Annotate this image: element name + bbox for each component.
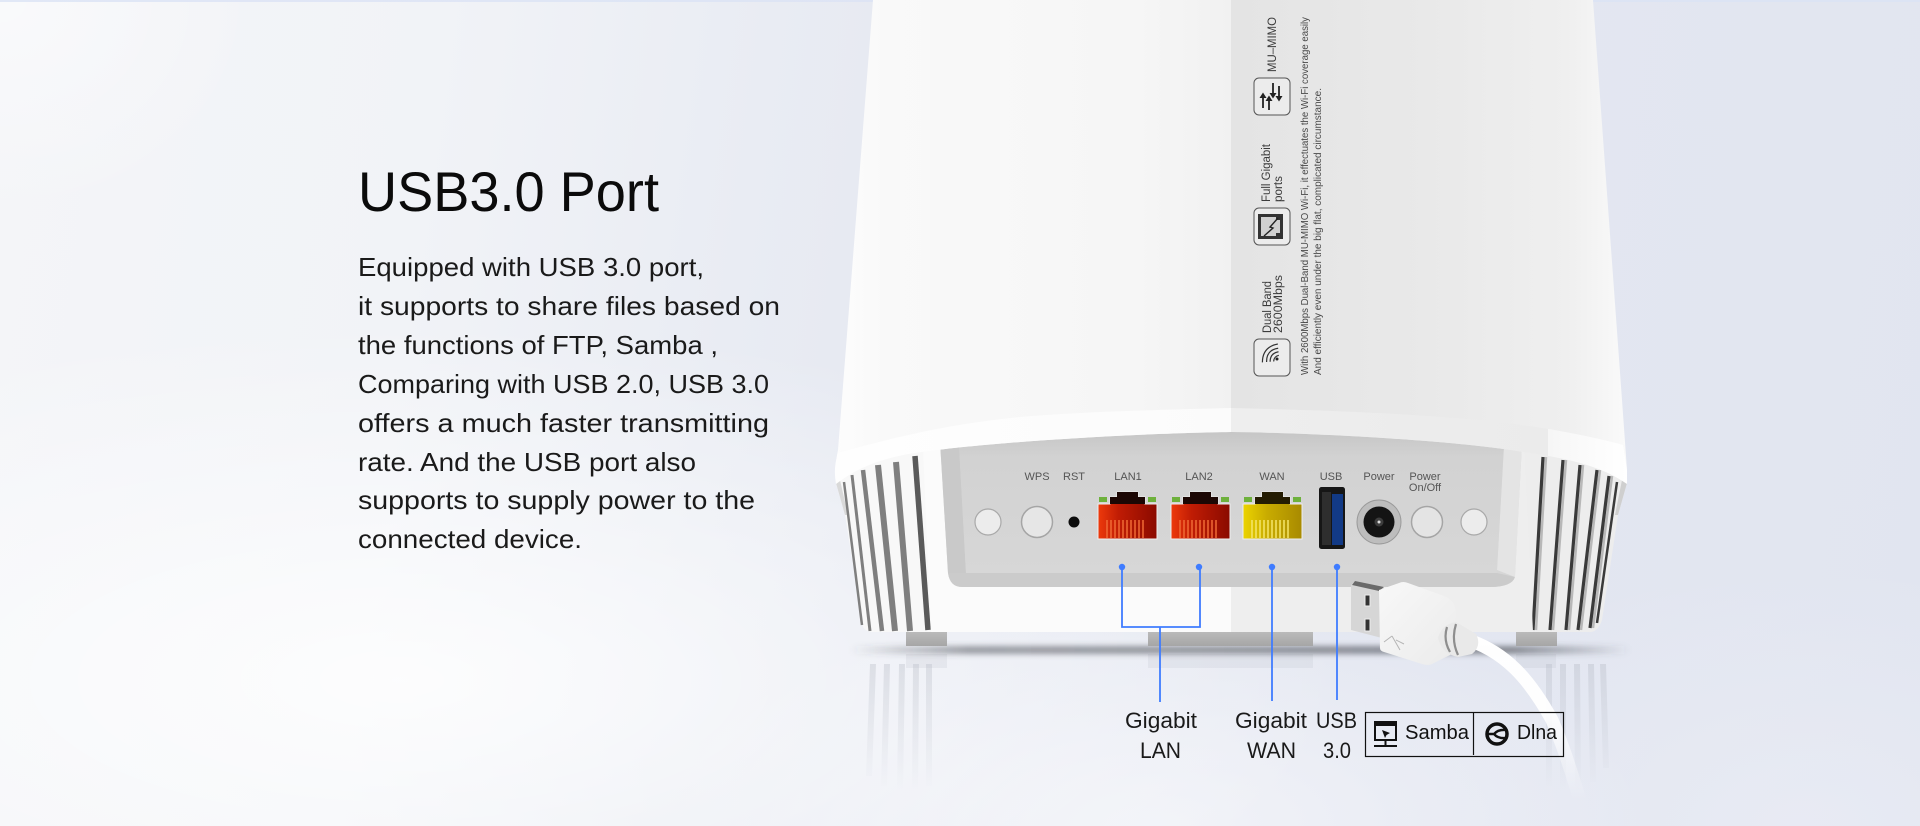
icon: Dlna (1487, 724, 1507, 744)
label: Gigabit WAN: Gigabit (1235, 708, 1307, 733)
label: Gigabit WAN (1235, 708, 1307, 763)
label: Gigabit LAN: Gigabit (1125, 708, 1197, 733)
port labels: On/Off (1409, 482, 1442, 494)
icon: MU-MIMO (1254, 78, 1290, 115)
USB plug (1351, 581, 1478, 665)
port labels: WPS (1024, 471, 1050, 483)
Full Gigabit ports label: Full Gigabit (1261, 143, 1273, 202)
body text: rate. And the USB port also (358, 447, 696, 477)
port labels: RST (1063, 471, 1085, 483)
Dual Band label: Dual Band (1262, 281, 1274, 333)
label: Gigabit LAN (1125, 708, 1197, 763)
body text: the functions of FTP, Samba , (358, 330, 718, 360)
icon: gigabit port (1254, 208, 1290, 245)
LAN1 port (1098, 492, 1157, 539)
router chassis (922, 425, 1533, 632)
router feet (906, 630, 1557, 646)
title: USB3.0 Port (358, 160, 659, 223)
callout: USB leader line (1334, 564, 1340, 700)
body text: Comparing with USB 2.0, USB 3.0 (358, 369, 769, 399)
reflection of router (866, 654, 1609, 790)
right side vents (1520, 450, 1627, 632)
label: USB 3.0: USB (1316, 708, 1357, 733)
port labels: Power (1409, 471, 1441, 483)
label: USB 3.0: 3.0 (1323, 738, 1351, 763)
port labels: USB (1320, 471, 1342, 483)
port labels (1024, 471, 1442, 494)
callout: WAN leader line (1269, 564, 1275, 701)
LAN2 port (1171, 492, 1230, 539)
port labels: WAN (1259, 471, 1285, 483)
back panel recess (939, 425, 1523, 587)
printed feature labels on router: 2600Mbps (1273, 275, 1285, 333)
WAN port (1243, 492, 1302, 539)
port labels: LAN1 (1114, 471, 1142, 483)
body text: connected device. (358, 524, 582, 554)
USB port (1319, 487, 1345, 549)
buttons and reset (975, 506, 1487, 538)
callout: LAN leader lines (1119, 564, 1202, 702)
label: USB 3.0 (1316, 708, 1357, 763)
USB cable (1462, 638, 1580, 800)
body text (358, 252, 780, 554)
power jack (1357, 500, 1401, 544)
icon: Samba (1374, 721, 1397, 746)
printed feature labels on router: And efficiently even under the big flat, complicated circumstance. (1313, 88, 1324, 375)
router base shadow (850, 646, 1630, 654)
Samba text: Samba (1405, 722, 1470, 744)
body text: Equipped with USB 3.0 port, (358, 252, 704, 282)
router upper body (835, 0, 1627, 484)
port labels: Power (1363, 471, 1395, 483)
MU-MIMO label: MU–MIMO (1267, 17, 1279, 72)
body text: it supports to share files based on (358, 291, 780, 321)
body text: supports to supply power to the (358, 485, 755, 515)
label: Gigabit LAN: LAN (1140, 738, 1181, 763)
body text: offers a much faster transmitting (358, 408, 769, 438)
icon: wifi (1254, 339, 1290, 376)
label: Gigabit WAN: WAN (1247, 738, 1296, 763)
protocol box: Samba and Dlna (1366, 712, 1564, 756)
port labels: LAN2 (1185, 471, 1213, 483)
Dlna text: Dlna (1517, 722, 1558, 744)
printed feature labels on router (1254, 17, 1324, 376)
left side vents (836, 450, 935, 632)
product description: With 2600Mbps Dual-Band MU-MIMO Wi-Fi, it effectuates the Wi-Fi coverage easily (1300, 17, 1311, 375)
printed feature labels on router: ports (1273, 176, 1285, 202)
